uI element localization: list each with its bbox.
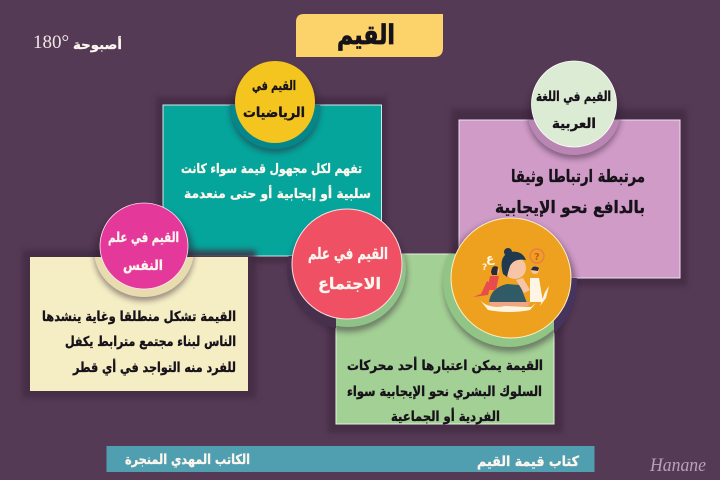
panel: sociology <box>328 254 563 433</box>
badge: mathematics: الرياضيات <box>243 105 305 121</box>
psychology body text: القيمة تشكل منطلقا وغاية ينشدها <box>42 309 236 325</box>
psychology body text: الناس لبناء مجتمع مترابط يكفل <box>65 334 236 350</box>
sociology body text: القيمة يمكن اعتبارها أحد محركات <box>347 357 543 374</box>
signature: Hanane <box>649 455 706 476</box>
badge: psychology: القيم في علم <box>108 230 179 246</box>
footer bar <box>106 446 594 472</box>
icon: woman leaning on desk: ? <box>482 263 487 273</box>
language body text: بالدافع نحو الإيجابية <box>495 198 645 218</box>
psychology body text <box>42 309 236 376</box>
badge: mathematics: القيم في <box>252 79 296 94</box>
badge: illustration of thinking woman <box>443 215 577 352</box>
math body text: سلبية أو إيجابية أو حتى منعدمة <box>184 185 371 202</box>
math body text: تفهم لكل مجهول قيمة سواء كانت <box>181 162 362 177</box>
badge: sociology <box>287 209 407 332</box>
badge: mathematics <box>230 61 320 153</box>
icon: woman leaning on desk: ع <box>486 251 495 265</box>
footer bar: الكاتب المهدي المنجرة <box>125 452 250 468</box>
badge: psychology: النفس <box>123 258 163 274</box>
badge: Arabic language <box>527 61 621 159</box>
sociology body text: الفردية أو الجماعية <box>391 408 500 425</box>
footer bar: كتاب قيمة القيم <box>477 454 580 470</box>
source label: أصبوحة <box>73 36 122 53</box>
panel: mathematics <box>156 97 387 263</box>
math body text <box>181 162 371 202</box>
badge: sociology: الاجتماع <box>318 274 381 293</box>
language body text: مرتبطة ارتباطا وثيقا <box>511 167 645 187</box>
source label: 180° <box>33 32 69 53</box>
psychology body text: للفرد منه التواجد في أي قطر <box>72 359 236 376</box>
title banner <box>296 14 443 57</box>
title banner: القيم <box>337 20 395 51</box>
badge: psychology <box>94 203 194 301</box>
icon: woman leaning on desk: ? <box>534 252 540 263</box>
badge: Arabic language: العربية <box>552 116 596 132</box>
icon: woman leaning on desk <box>473 248 549 312</box>
panel: psychology <box>22 250 256 398</box>
sociology body text <box>347 357 543 425</box>
sociology body text: السلوك البشري نحو الإيجابية سواء <box>347 384 542 400</box>
badge: Arabic language: القيم في اللغة <box>536 89 611 105</box>
source label <box>33 32 122 53</box>
language body text <box>495 167 645 218</box>
panel: Arabic language <box>451 109 687 286</box>
badge: sociology: القيم في علم <box>308 244 388 264</box>
